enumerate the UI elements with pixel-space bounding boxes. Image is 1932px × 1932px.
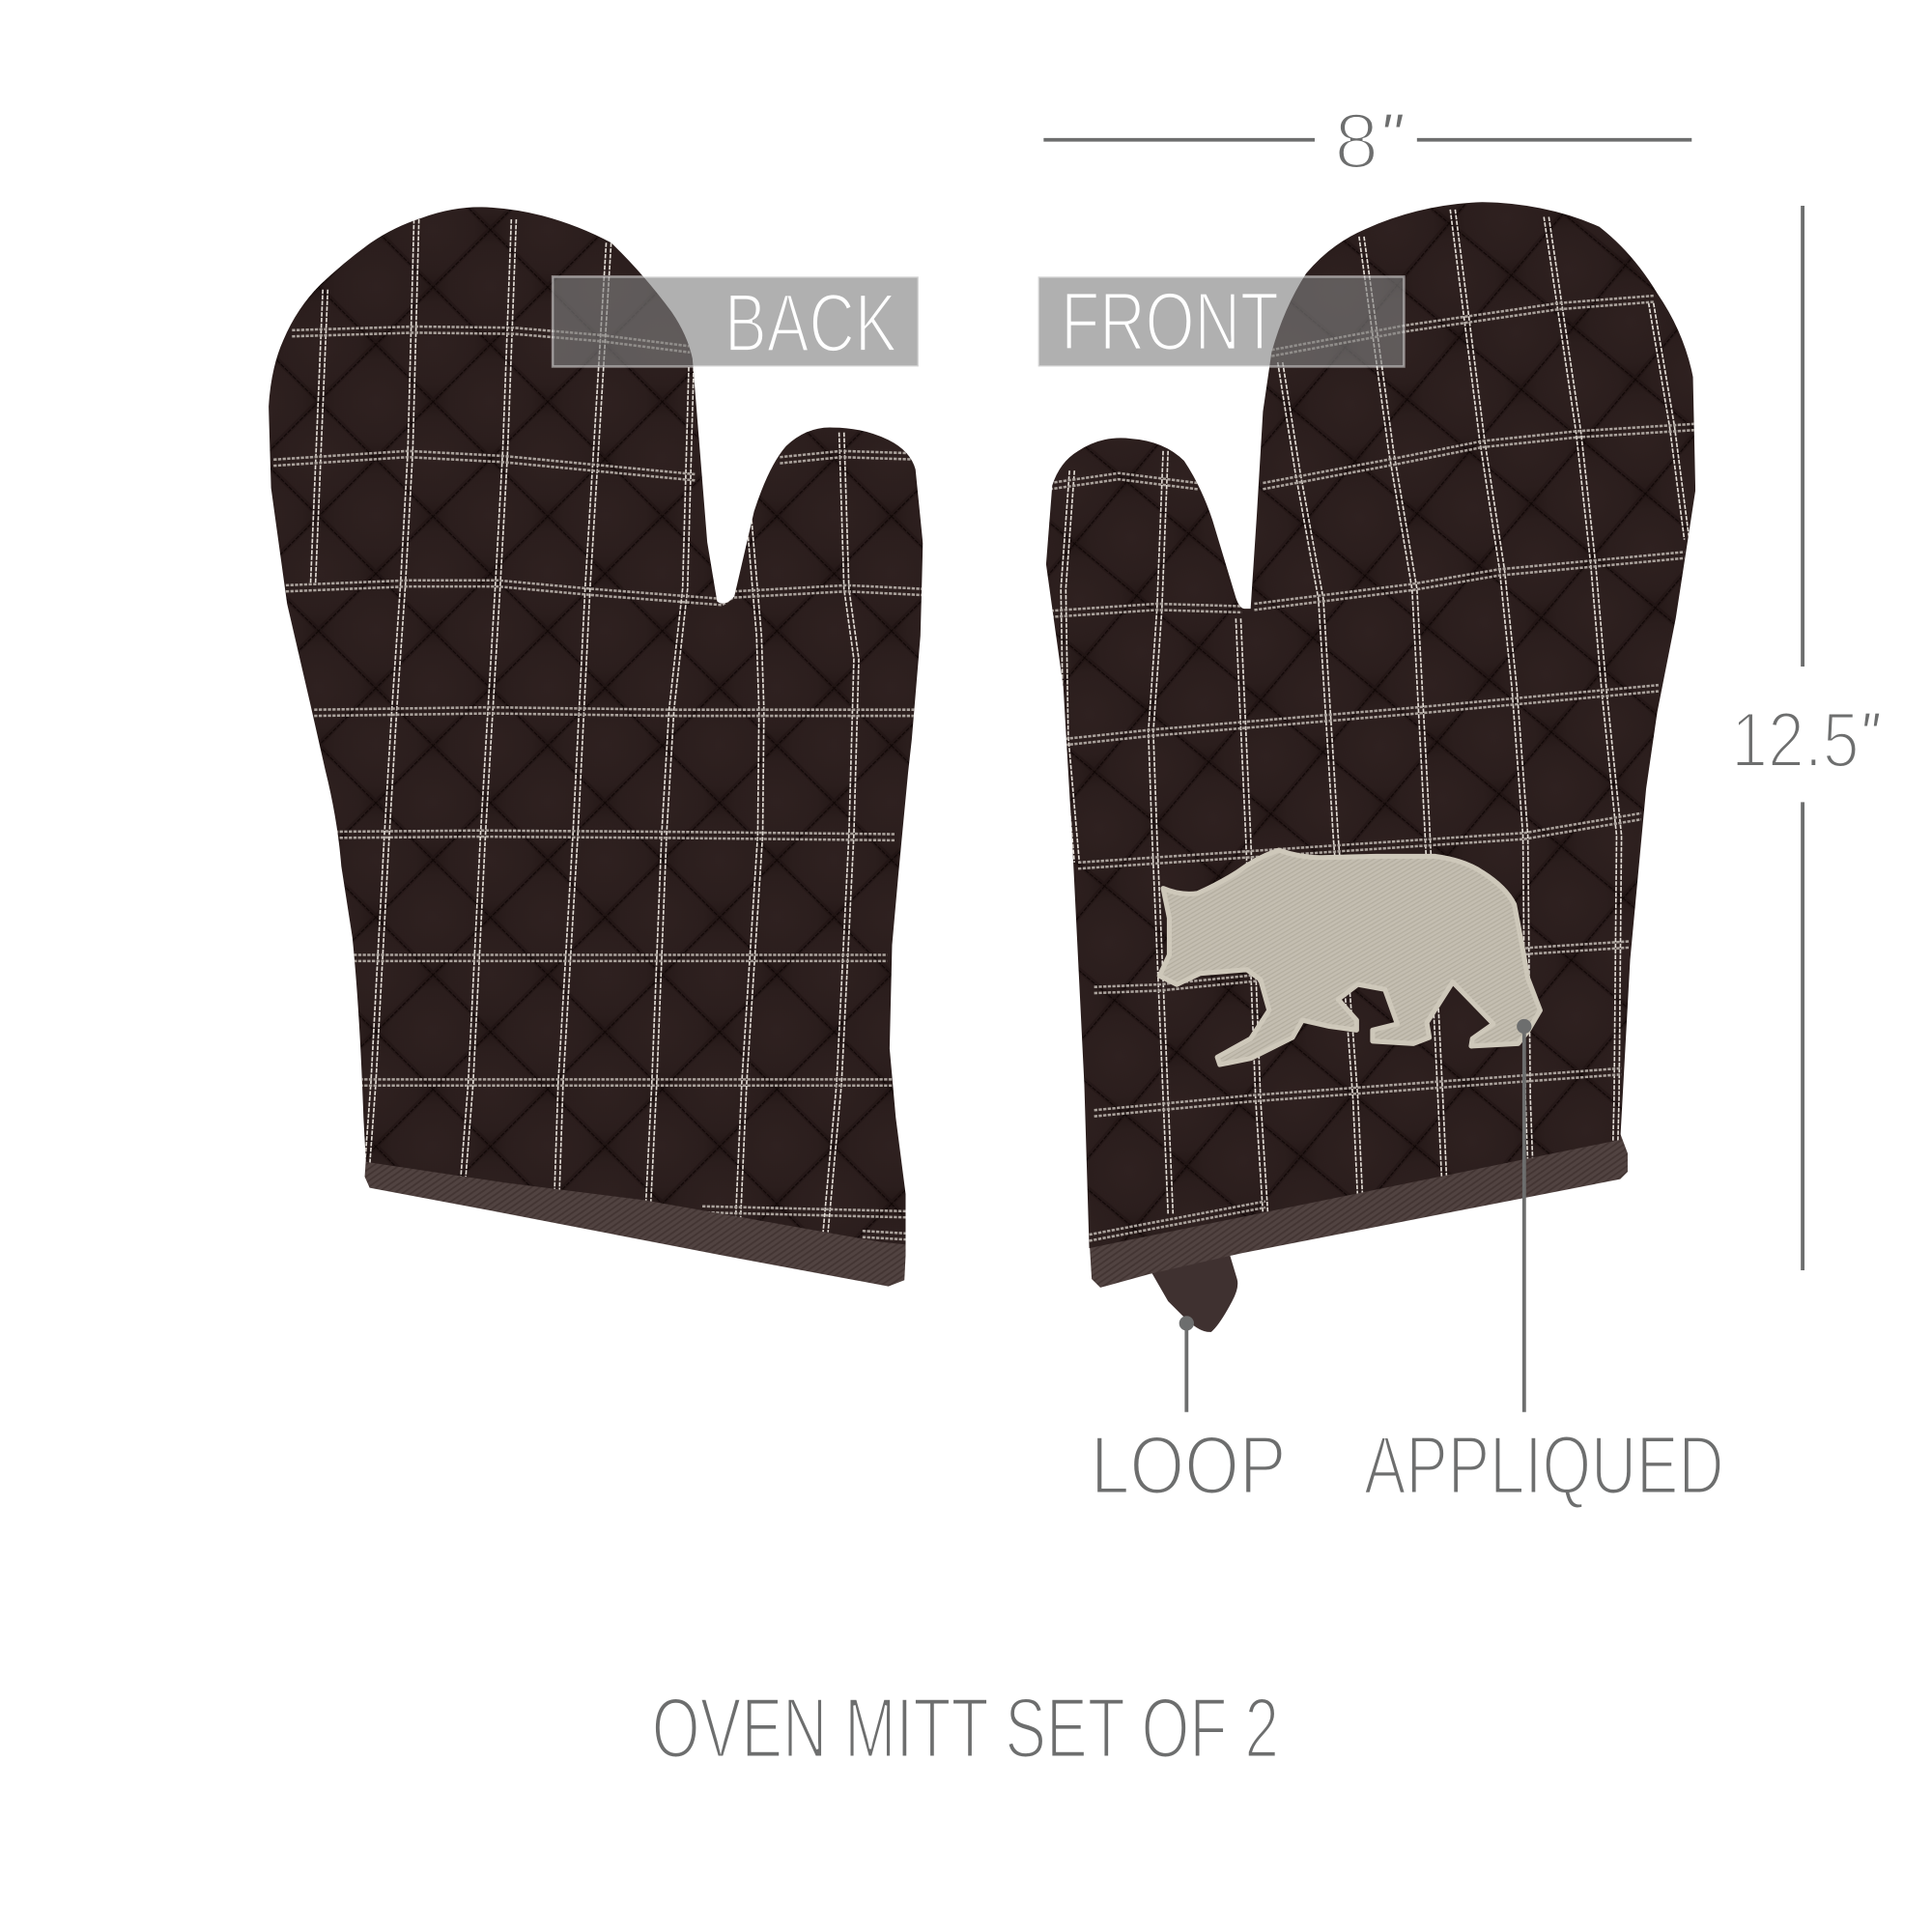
title: OVEN MITT SET OF 2 [652,1680,1279,1776]
appliqued bear [1159,850,1540,1065]
mitt body: front mitt [1035,185,1713,1269]
right oven mitt: front view [1035,185,1713,1332]
height dimension: 12.5 inches: " [1860,699,1880,769]
callout: loop [1091,1316,1287,1512]
height dimension: 12.5 inches: 12.5 [1731,696,1882,783]
callout: appliqued: APPLIQUED [1364,1420,1723,1512]
back label tag [553,276,919,370]
width dimension: 8 inches: 8 [1334,98,1378,185]
width dimension: 8 inches [1043,98,1691,185]
callout: appliqued [1364,1019,1723,1512]
mitt body: back mitt [246,185,936,1269]
cuff binding: back mitt [365,1158,906,1287]
left oven mitt: back view [246,185,936,1287]
back label tag: BACK [724,278,897,370]
hanging loop [1150,1254,1237,1332]
callout: loop: LOOP [1091,1420,1287,1512]
height dimension: 12.5 inches [1731,206,1880,1270]
infographic canvas [269,114,1880,1756]
width dimension: 8 inches: " [1378,100,1404,170]
cuff binding: front mitt [1090,1133,1628,1288]
front label tag: FRONT [1061,276,1279,368]
